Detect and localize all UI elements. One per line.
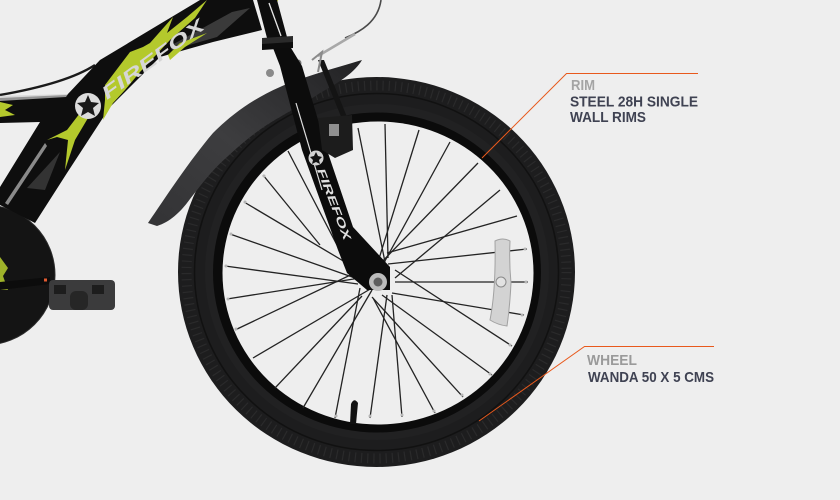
callout: wheel bbox=[479, 346, 714, 421]
brake assembly bbox=[312, 52, 353, 158]
fork and head tube bbox=[257, 0, 390, 291]
wheel label: WHEEL bbox=[587, 352, 637, 369]
tire bbox=[178, 77, 575, 467]
frame bbox=[0, 0, 278, 223]
fender bbox=[148, 60, 362, 226]
rim label: RIM bbox=[571, 77, 595, 94]
logo badge bbox=[75, 93, 101, 119]
leader line: wheel bbox=[479, 346, 714, 421]
valve stem bbox=[350, 400, 358, 424]
hub nut bbox=[369, 273, 387, 291]
leader line: rim bbox=[482, 74, 698, 158]
spokes bbox=[225, 124, 528, 418]
chain guard bbox=[0, 205, 55, 345]
illustration: bicycle front bbox=[0, 0, 575, 467]
wheel description: WANDA 50 X 5 CMS bbox=[588, 369, 714, 386]
rim description: WALL RIMS bbox=[570, 109, 646, 126]
lime flame decals bbox=[0, 0, 278, 170]
brand name: FIREFOX: FIREFOX bbox=[98, 14, 209, 103]
brake cable bbox=[0, 0, 381, 95]
callout: rim bbox=[482, 74, 698, 158]
rim opening bbox=[222, 122, 534, 424]
rim description: STEEL 28H SINGLE bbox=[570, 94, 698, 110]
reflector bbox=[490, 239, 511, 326]
fork brand name: FIREFOX bbox=[314, 167, 353, 243]
fork logo bbox=[308, 150, 324, 166]
pedal and crank bbox=[0, 277, 115, 310]
spoke nipples bbox=[224, 174, 528, 418]
front wheel bbox=[178, 77, 575, 467]
